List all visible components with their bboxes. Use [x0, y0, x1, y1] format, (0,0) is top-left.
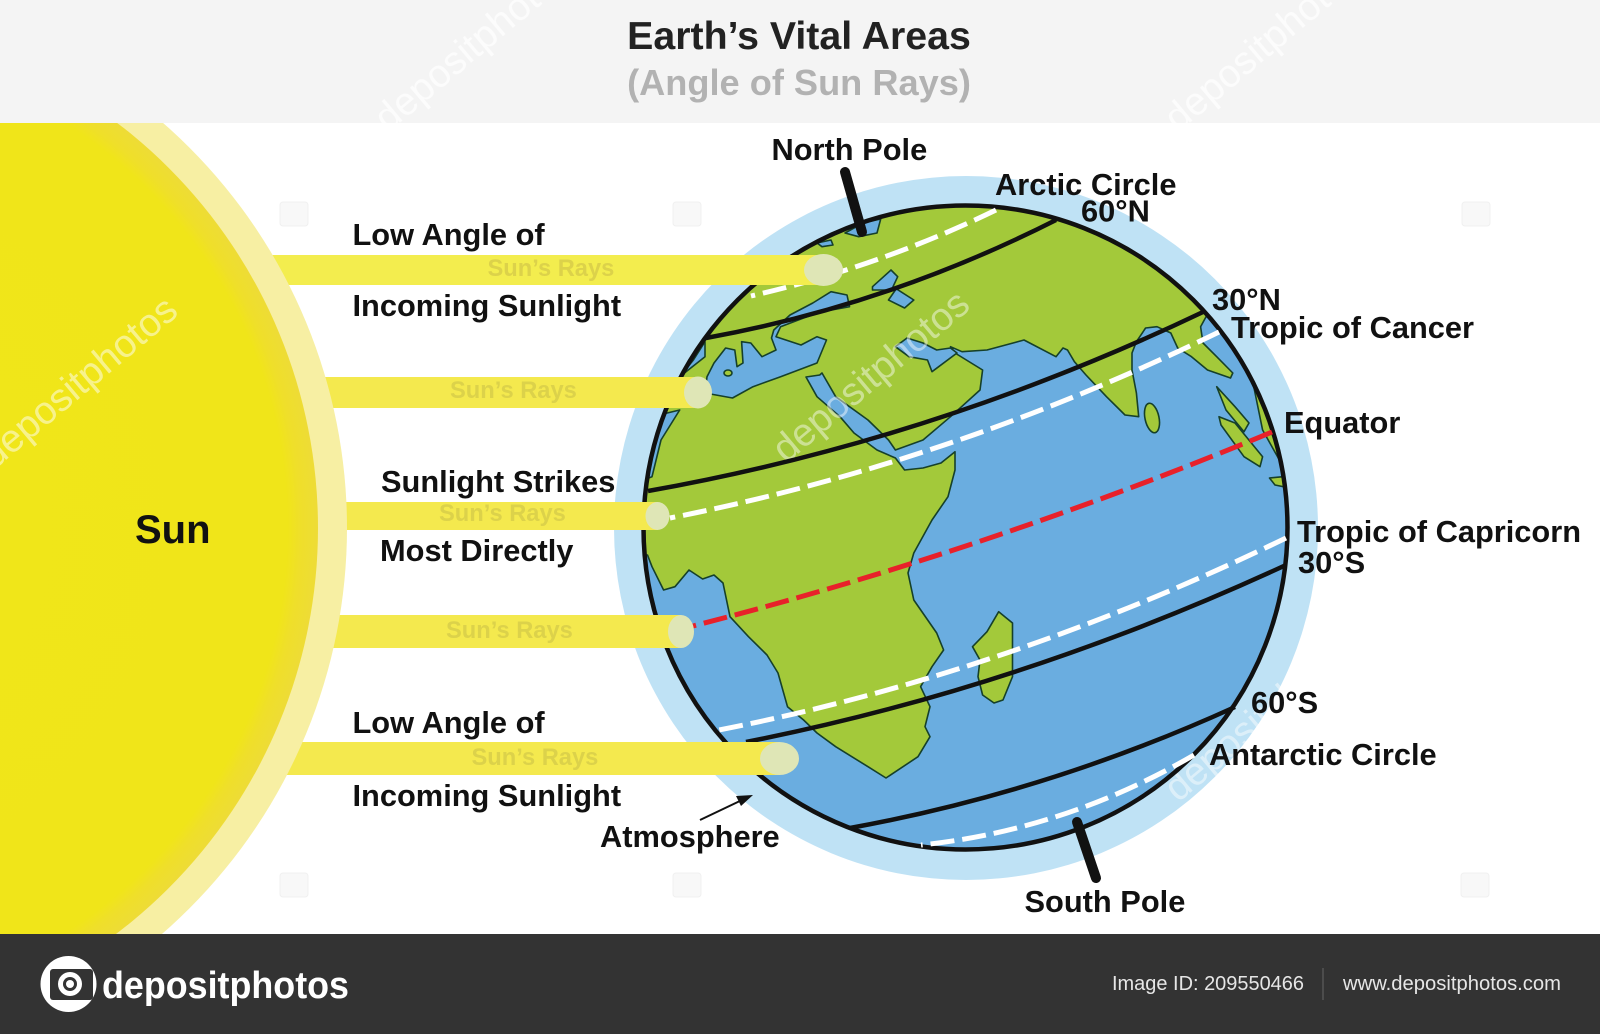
land masses	[630, 180, 1300, 778]
30N line	[648, 312, 1203, 491]
ray 5	[200, 742, 799, 775]
label: low angle bottom	[352, 705, 621, 813]
label: Arctic Circle: Arctic Circle	[995, 167, 1176, 202]
label: direct sunlight: Most Directly	[380, 533, 573, 568]
Java and Borneo	[1219, 417, 1263, 467]
Sumatra	[1217, 387, 1249, 432]
ray 2	[200, 376, 712, 408]
Mediterranean and Black Sea	[705, 292, 850, 398]
Tropic of Cancer line	[670, 332, 1219, 518]
subtitle: (Angle of Sun Rays)	[627, 62, 971, 103]
globe outline	[644, 206, 1288, 850]
icon: depositphotos logo	[40, 956, 96, 1012]
60S line	[850, 707, 1235, 828]
ocean	[644, 206, 1288, 850]
Arctic Circle line	[751, 210, 996, 296]
footer logo text: depositphotos	[102, 965, 349, 1007]
Arctic patches	[817, 240, 833, 247]
30S line	[746, 565, 1286, 742]
60N line	[706, 220, 1056, 338]
ray labels: Sun’s Rays	[439, 501, 566, 527]
sun	[0, 0, 347, 1034]
Madagascar	[972, 612, 1012, 703]
label: low angle top: Low Angle of	[352, 217, 545, 252]
North Pole axis	[845, 172, 862, 232]
South Pole axis	[1077, 822, 1096, 878]
label: 60S: 60°S	[1251, 685, 1318, 720]
label: low angle bottom: Low Angle of	[352, 705, 545, 740]
watermark on globe: depositphotos	[764, 282, 978, 471]
Eurasia and Africa	[646, 208, 1234, 779]
ray 3	[200, 502, 670, 530]
label: 60N: 60°N	[1081, 194, 1150, 228]
watermark camera icons	[83, 202, 1490, 897]
label: South Pole: South Pole	[1024, 884, 1185, 919]
Mediterranean islands	[724, 370, 732, 376]
header watermarks	[366, 0, 1370, 140]
ray labels: Sun’s Rays	[446, 618, 573, 644]
seas	[638, 219, 957, 482]
label: 30S: 30°S	[1298, 545, 1365, 580]
Sri Lanka	[1144, 402, 1160, 434]
arrow: atmosphere	[700, 795, 753, 820]
footer image id: Image ID: 209550466	[1112, 973, 1304, 995]
watermark on lower right globe: depositphotos	[1156, 621, 1370, 810]
label: low angle top	[352, 217, 621, 323]
ray labels: Sun’s Rays	[472, 745, 598, 771]
label: Equator: Equator	[1284, 405, 1400, 440]
label: low angle bottom: Incoming Sunlight	[352, 778, 621, 813]
label: 30N: 30°N	[1212, 282, 1281, 317]
Tropic of Capricorn line	[719, 538, 1286, 730]
label: Atmosphere: Atmosphere	[600, 819, 780, 854]
ray labels: Sun’s Rays	[450, 378, 577, 404]
ray 4	[200, 615, 694, 648]
label: direct sunlight	[380, 464, 615, 568]
label: Antarctic Circle: Antarctic Circle	[1209, 737, 1437, 772]
label: direct sunlight: Sunlight Strikes	[381, 464, 615, 499]
ray labels	[439, 256, 614, 771]
footer url: www.depositphotos.com	[1342, 973, 1561, 995]
title: Earth’s Vital Areas	[627, 14, 971, 58]
label: Tropic of Cancer: Tropic of Cancer	[1231, 310, 1474, 345]
sun label: Sun	[135, 508, 211, 552]
globe	[614, 172, 1370, 880]
ray labels: Sun’s Rays	[488, 256, 614, 282]
label: Tropic of Capricorn: Tropic of Capricorn	[1297, 514, 1581, 549]
Antarctic Circle line	[921, 755, 1194, 845]
Atlantic slivers	[685, 341, 706, 374]
label: low angle top: Incoming Sunlight	[352, 288, 621, 323]
footer divider	[1322, 968, 1324, 1000]
Equator line	[693, 432, 1272, 626]
label: North Pole: North Pole	[772, 132, 927, 167]
header band	[0, 0, 1600, 123]
footer band	[0, 934, 1600, 1034]
atmosphere	[614, 176, 1318, 880]
Persian Gulf	[895, 338, 957, 372]
Caspian Sea	[872, 270, 914, 308]
ray 1	[200, 254, 843, 286]
